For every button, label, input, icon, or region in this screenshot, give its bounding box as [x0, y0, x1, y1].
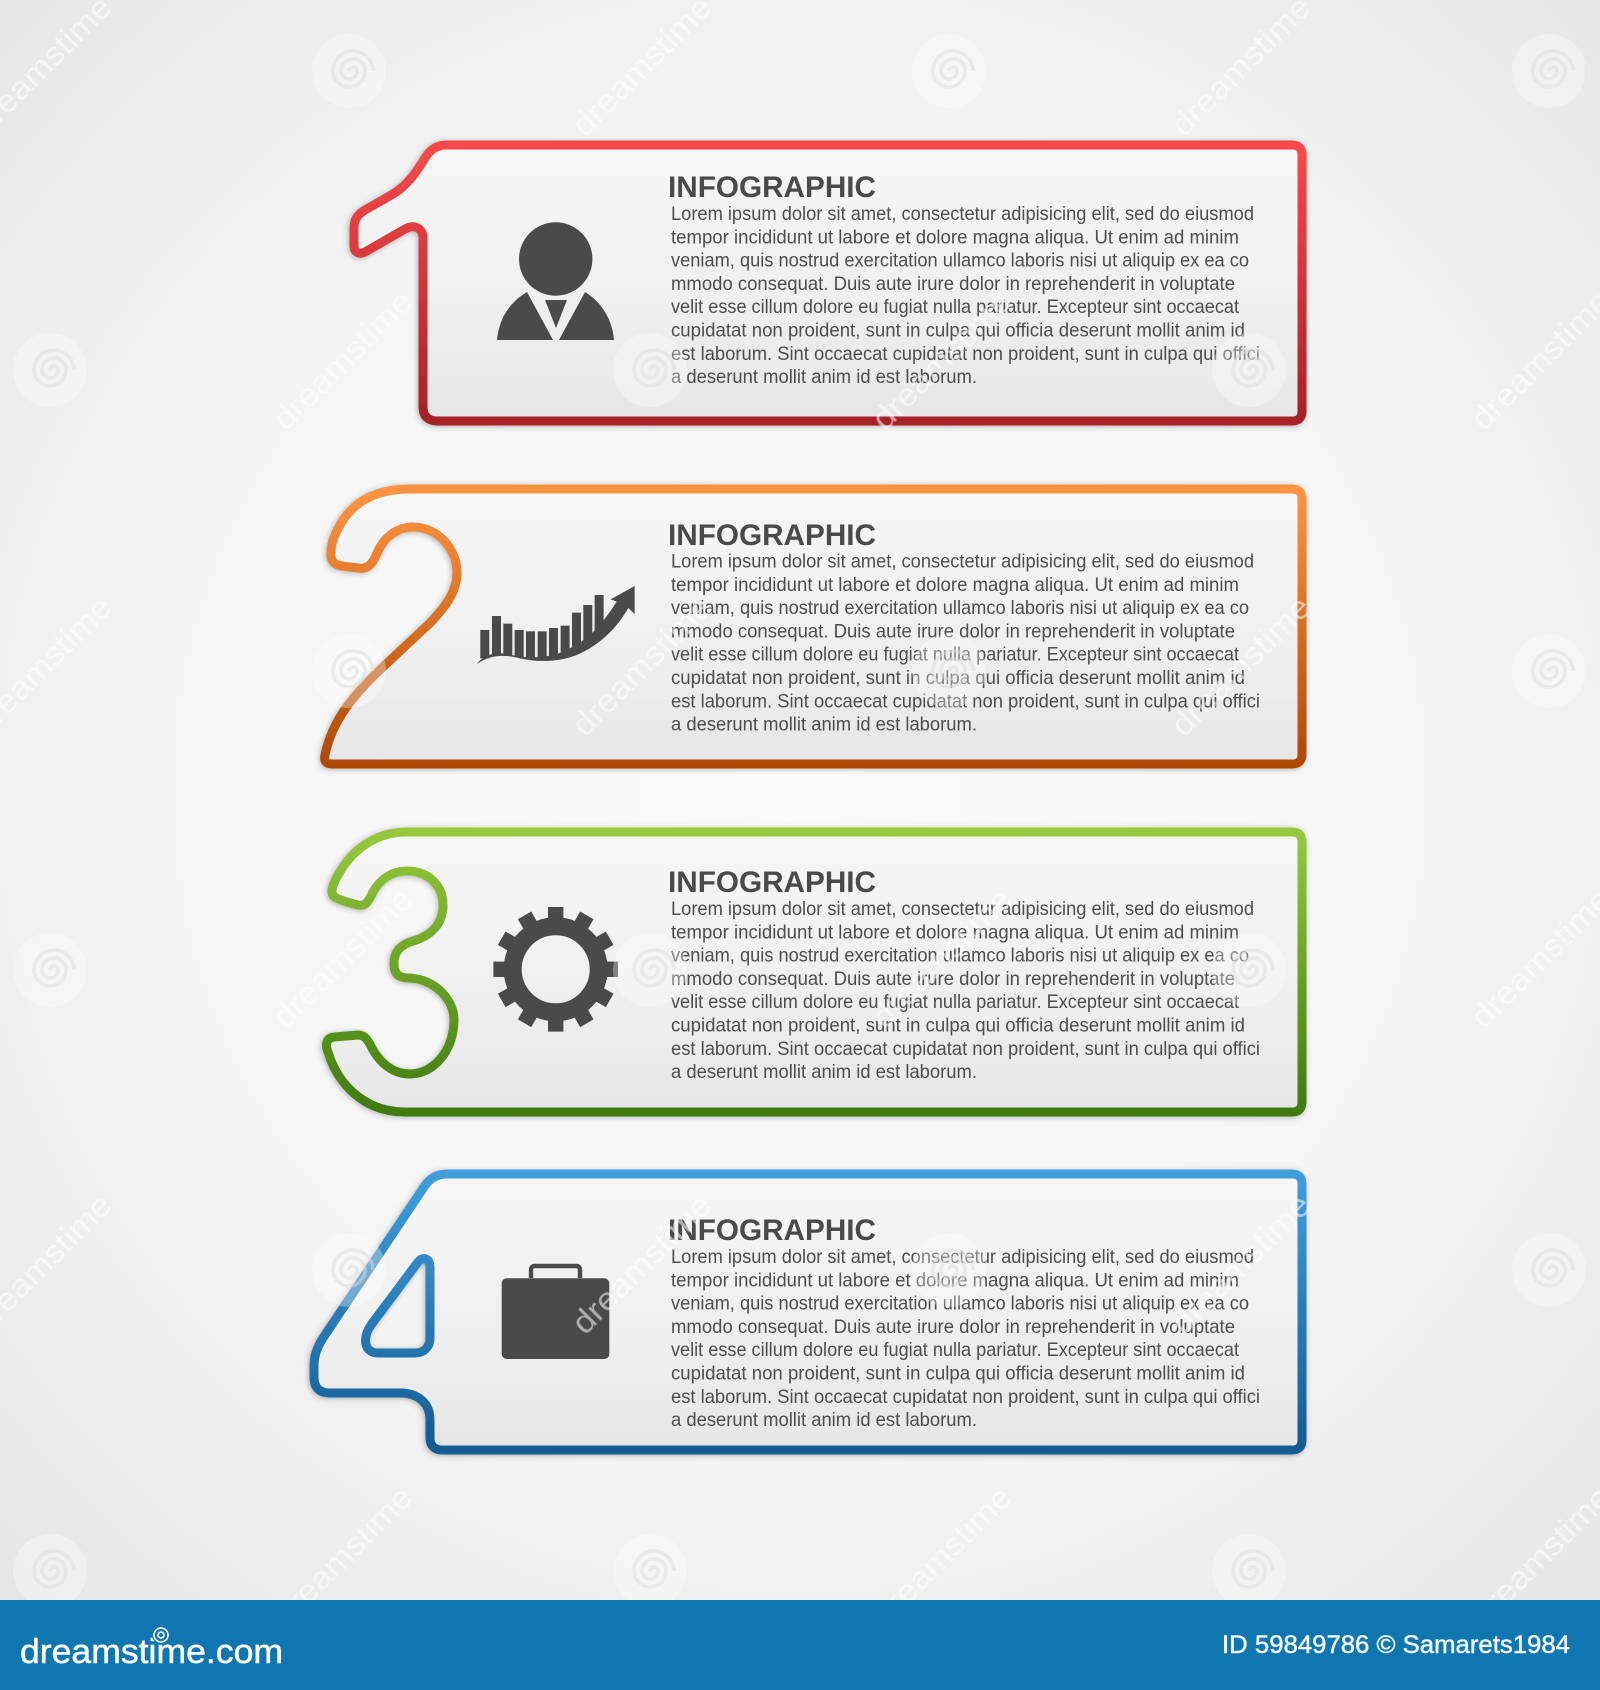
text block 1: Lorem ipsum dolor sit amet, consectetur adipisicing elit, sed do eiusmod [671, 203, 1254, 225]
heading 4: INFOGRAPHIC [668, 1214, 876, 1247]
watermark diagonal text: dreamstime [1163, 0, 1318, 143]
text block 2: est laborum. Sint occaecat cupidatat non proident, sunt in culpa qui offici [671, 690, 1260, 712]
watermark diagonal text: dreamstime [1163, 589, 1318, 743]
text block 4: est laborum. Sint occaecat cupidatat non proident, sunt in culpa qui offici [671, 1386, 1260, 1408]
icon: person [497, 222, 614, 340]
text block 3: tempor incididunt ut labore et dolore magna aliqua. Ut enim ad minim [671, 921, 1239, 943]
text block 2 [671, 550, 1260, 736]
footer image id and credit: ID 59849786 © Samarets1984 [1222, 1631, 1570, 1659]
text block 2: cupidatat non proident, sunt in culpa qui officia deserunt mollit anim id [671, 667, 1245, 689]
text block 1: velit esse cillum dolore eu fugiat nulla pariatur. Excepteur sint occaecat [671, 296, 1240, 318]
text block 1: est laborum. Sint occaecat cupidatat non proident, sunt in culpa qui offici [671, 343, 1260, 365]
text block 1: a deserunt mollit anim id est laborum. [671, 366, 977, 388]
heading 1: INFOGRAPHIC [668, 171, 876, 204]
text block 2: velit esse cillum dolore eu fugiat nulla pariatur. Excepteur sint occaecat [671, 644, 1240, 666]
watermark diagonal text: dreamstime [564, 589, 719, 743]
text block 1: tempor incididunt ut labore et dolore magna aliqua. Ut enim ad minim [671, 226, 1239, 248]
watermark diagonal text: dreamstime [864, 283, 1019, 437]
text block 1: mmodo consequat. Duis aute irure dolor in reprehenderit in voluptate [671, 273, 1235, 295]
panel 2: orange number two [325, 489, 1302, 764]
footer logo: dreamstime.com [20, 1633, 283, 1671]
text block 2: a deserunt mollit anim id est laborum. [671, 714, 977, 736]
text block 1: cupidatat non proident, sunt in culpa qui officia deserunt mollit anim id [671, 320, 1245, 342]
heading 2: INFOGRAPHIC [668, 519, 876, 552]
text block 3: a deserunt mollit anim id est laborum. [671, 1061, 977, 1083]
text block 2: veniam, quis nostrud exercitation ullamco laboris nisi ut aliquip ex ea co [671, 597, 1249, 619]
text block 1: veniam, quis nostrud exercitation ullamco laboris nisi ut aliquip ex ea co [671, 250, 1249, 272]
text block 4: cupidatat non proident, sunt in culpa qui officia deserunt mollit anim id [671, 1362, 1245, 1384]
watermark diagonal text: dreamstime [265, 283, 420, 437]
text block 3 [671, 898, 1260, 1083]
footer bar [0, 1600, 1600, 1690]
watermark diagonal text: dreamstime [564, 0, 719, 143]
text block 4 [671, 1246, 1260, 1431]
text block 4: Lorem ipsum dolor sit amet, consectetur adipisicing elit, sed do eiusmod [671, 1246, 1254, 1268]
text block 4: mmodo consequat. Duis aute irure dolor in reprehenderit in voluptate [671, 1316, 1235, 1338]
text block 1 [671, 203, 1260, 388]
outline shape: numeral 3 [326, 832, 1302, 1112]
text block 3: est laborum. Sint occaecat cupidatat non proident, sunt in culpa qui offici [671, 1038, 1260, 1060]
outline shape: numeral 2 [325, 489, 1302, 764]
icon: briefcase [502, 1266, 609, 1359]
watermark diagonal text: dreamstime [265, 881, 420, 1035]
text block 3: velit esse cillum dolore eu fugiat nulla pariatur. Excepteur sint occaecat [671, 991, 1240, 1013]
text block 3: Lorem ipsum dolor sit amet, consectetur adipisicing elit, sed do eiusmod [671, 898, 1254, 920]
panel 1: red number one [354, 145, 1302, 421]
heading 3: INFOGRAPHIC [668, 866, 876, 899]
text block 4: velit esse cillum dolore eu fugiat nulla pariatur. Excepteur sint occaecat [671, 1339, 1240, 1361]
watermark diagonal text: dreamstime [1163, 1187, 1318, 1341]
icon: gear [493, 907, 618, 1032]
watermark diagonal text: dreamstime [864, 881, 1019, 1035]
text block 3: mmodo consequat. Duis aute irure dolor in reprehenderit in voluptate [671, 968, 1235, 990]
panel 3: green number three [326, 832, 1302, 1112]
icon: growth chart with arrow [477, 586, 635, 664]
text block 4: a deserunt mollit anim id est laborum. [671, 1409, 977, 1431]
watermark diagonal text: dreamstime [265, 1479, 420, 1633]
text block 4: tempor incididunt ut labore et dolore magna aliqua. Ut enim ad minim [671, 1269, 1239, 1291]
outline shape: numeral 4 [314, 1174, 1302, 1450]
watermark diagonal text: dreamstime [564, 1187, 719, 1341]
text block 3: cupidatat non proident, sunt in culpa qui officia deserunt mollit anim id [671, 1014, 1245, 1036]
text block 4: veniam, quis nostrud exercitation ullamco laboris nisi ut aliquip ex ea co [671, 1293, 1249, 1315]
panel 4: blue number four [314, 1174, 1302, 1450]
watermark diagonal text: dreamstime [864, 1479, 1019, 1633]
text block 3: veniam, quis nostrud exercitation ullamco laboris nisi ut aliquip ex ea co [671, 945, 1249, 967]
text block 2: Lorem ipsum dolor sit amet, consectetur adipisicing elit, sed do eiusmod [671, 550, 1254, 572]
outline shape: numeral 1 [354, 145, 1302, 421]
text block 2: mmodo consequat. Duis aute irure dolor in reprehenderit in voluptate [671, 620, 1235, 642]
text block 2: tempor incididunt ut labore et dolore magna aliqua. Ut enim ad minim [671, 574, 1239, 596]
